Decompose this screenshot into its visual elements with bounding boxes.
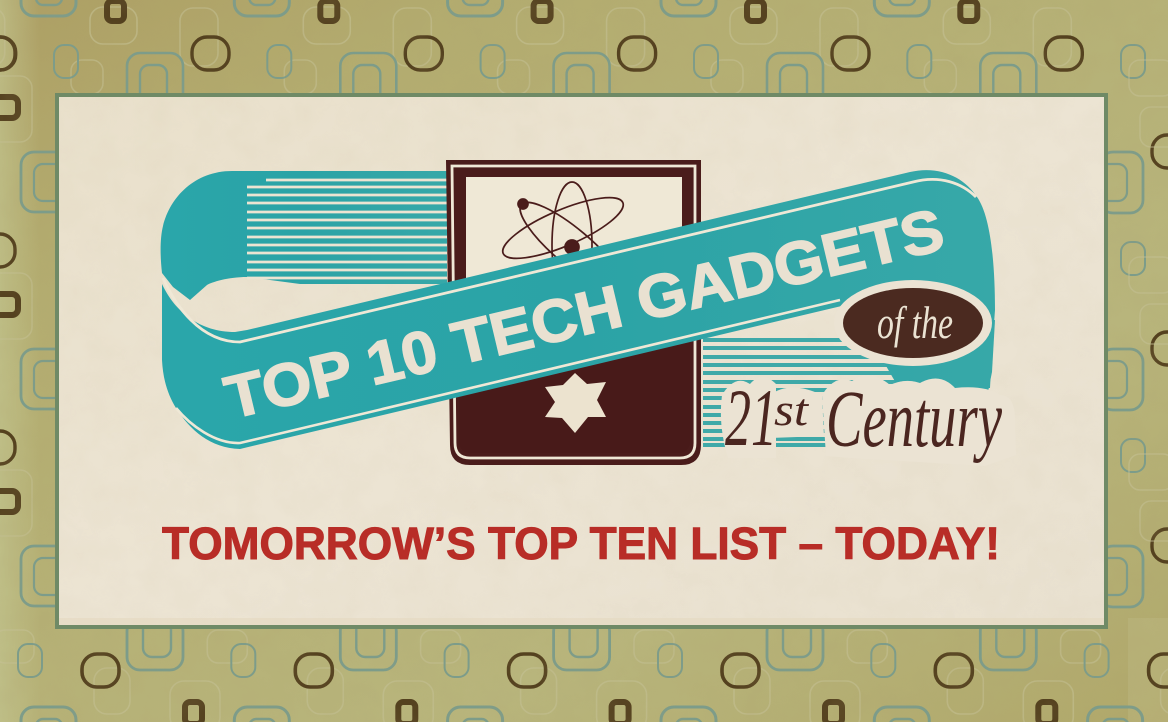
- ribbon title: TOP 10 TECH GADGETS: [218, 196, 950, 432]
- upper back ribbon with stripes: [161, 171, 447, 300]
- tagline: TOMORROW’S TOP TEN LIST – TODAY!: [162, 518, 1000, 569]
- script subtitle: 21st Century: [721, 372, 1016, 466]
- icon: six-pointed star: [545, 373, 606, 433]
- main ribbon banner: [162, 170, 995, 449]
- badge: of the: [834, 280, 992, 366]
- shield with atom and star: [446, 160, 701, 465]
- icon: atom: [496, 182, 634, 308]
- script subtitle: 21st Century: Century: [826, 376, 1002, 464]
- badge text: of the: [877, 297, 953, 348]
- script subtitle: 21st Century: st: [774, 384, 809, 435]
- script subtitle: 21st Century: 21: [725, 372, 777, 463]
- panel: cream paper card with green border: [57, 95, 1106, 627]
- lower back ribbon stripes: [703, 340, 920, 445]
